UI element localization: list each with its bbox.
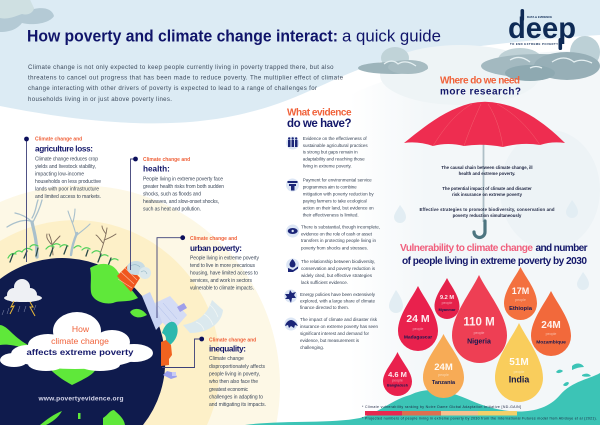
panel: inequality (162, 337, 266, 408)
evidence 6: insurance on extreme poverty has seen (300, 324, 378, 329)
evidence 6: challenging. (300, 345, 324, 350)
chart: vulnerability drops (383, 267, 571, 402)
logo: deep: deep (508, 12, 576, 45)
research question 1 (441, 165, 533, 176)
panel: inequality: challenges in adapting to (209, 394, 263, 400)
panel: more research (404, 76, 565, 238)
drop: Myanmar (434, 278, 460, 319)
panel: agriculture loss: lands with poor infrastructure (35, 186, 99, 192)
panel: agriculture loss: Climate change and (35, 136, 82, 142)
drop: Myanmar: people (442, 301, 452, 305)
drop: Bangladesh: people (392, 378, 403, 382)
evidence 5: Energy policies have been extensively (300, 292, 376, 297)
heading: where do we need more research (440, 76, 521, 98)
callout cloud (0, 312, 153, 371)
drop: Ethiopia: 17M (512, 286, 529, 296)
drop: Madagascar (398, 286, 438, 351)
evidence 4 (286, 258, 376, 285)
evidence 2: action on their land, but evidence on (303, 206, 374, 210)
panel: health: heatwaves, and slow-onset shocks, (143, 199, 219, 205)
evidence 3: There is substantial, though incomplete, (301, 224, 380, 230)
panel: health: health: (143, 164, 170, 174)
panel: inequality: people living in poverty, (209, 372, 260, 378)
website link: www.povertyevidence.org (38, 396, 124, 402)
icon: cash transfer (286, 224, 299, 238)
panel: inequality: Climate change (209, 356, 244, 362)
icon: energy (284, 290, 297, 303)
drop: Bangladesh: 4.6 M (388, 370, 407, 379)
note: vulnerability ranking: * Climate vulnerability ranking by Notre Dame Global Adaptation Initiative [ND-GAIN] (362, 405, 521, 409)
drop: Myanmar: 9.2 M (440, 295, 454, 301)
evidence 3: transfers in protecting people living in (301, 238, 376, 243)
panel: inequality: inequality: (209, 344, 246, 354)
drop: Tanzania: Tanzania (432, 380, 456, 386)
icon: hand with plant (286, 258, 299, 272)
panel: urban poverty: urban poverty: (190, 244, 242, 253)
evidence 1: Evidence on the effectiveness of (303, 136, 367, 141)
drop: India: 51M (509, 357, 529, 368)
panel: health: such as heat and pollution. (143, 206, 201, 212)
drop: Mozambique: 24M (541, 320, 561, 331)
drop: Mozambique: people (546, 332, 556, 336)
title suffix: a quick guide (342, 26, 441, 46)
intro text: change interacting with other drivers of poverty is expected to lead to a range of challenges for (28, 85, 317, 92)
evidence 1: is strong but gaps remain in (303, 150, 358, 155)
panel: health (130, 157, 224, 270)
logo: deep: TO END EXTREME POVERTY (510, 42, 558, 46)
heading: vulnerability (400, 243, 588, 267)
panel: urban poverty (157, 235, 260, 318)
evidence 5: explored, with a large share of climate (300, 298, 375, 304)
tree illustrations (7, 200, 118, 266)
title: How poverty and climate change interact: (27, 26, 338, 46)
drop: Nigeria: people (474, 331, 484, 335)
intro text: threatens to cancel out progress that has been made to reduce poverty. The multiplier effect of climate (28, 74, 344, 82)
legend and notes (362, 405, 597, 420)
icon: storm cloud (2, 279, 42, 316)
panel: urban poverty: Climate change and (190, 236, 237, 242)
evidence 6: evidence, but measurement is (300, 338, 360, 343)
heading: what evidence (287, 108, 352, 130)
panel: agriculture loss: yields and livestock viability, (35, 164, 96, 170)
evidence 2: mitigation with poverty reduction by (303, 192, 374, 196)
heading: vulnerability: and number (536, 243, 588, 254)
heading: where do we need more research: Where do we need (440, 76, 520, 86)
callout title: climate change (51, 336, 109, 346)
panel: inequality: and mitigating its impacts. (209, 402, 266, 408)
panel: health: Climate change and (143, 157, 190, 163)
icon: payment (286, 178, 299, 192)
panel: inequality: Climate change and (209, 338, 256, 344)
drop: Madagascar: people (413, 327, 423, 331)
evidence 1 (286, 136, 368, 169)
panel: urban poverty: tend to live in more precarious (190, 263, 256, 269)
research question 3: poverty reduction simultaneously (453, 213, 522, 218)
panel: agriculture loss (24, 136, 101, 262)
drop: India (495, 323, 543, 402)
panel: inequality: greatest economic (209, 387, 248, 393)
evidence 2: Payment for environmental service (303, 178, 372, 183)
drop: Mozambique (531, 291, 571, 356)
heading: vulnerability: Vulnerability to climate change (400, 243, 533, 254)
panel: inequality: who then also face the (209, 379, 258, 385)
evidence 4: widely cited, but effective strategies (301, 273, 373, 278)
icon: flood wave (162, 322, 178, 348)
panel: health: shocks, such as floods and (143, 192, 201, 198)
evidence 1: adaptability and reaching those (303, 157, 365, 162)
intro text (28, 64, 344, 103)
heading: vulnerability: of people living in extreme poverty by 2030 (402, 256, 587, 267)
drop: Tanzania: people (438, 373, 449, 377)
evidence 1: sustainable agricultural practices (303, 143, 368, 148)
panel: agriculture loss: Climate change reduces crop (35, 156, 98, 162)
drop: Madagascar: 24 M (406, 313, 430, 325)
heading: what evidence: What evidence (287, 108, 352, 118)
drop: Ethiopia: Ethiopia (509, 306, 533, 312)
evidence 6 (284, 317, 378, 350)
panel: urban poverty: People living in extreme poverty (190, 256, 260, 262)
icon: damaged city (142, 292, 187, 332)
continents (0, 264, 147, 425)
evidence 4: conservation and poverty reduction is (301, 266, 376, 271)
drop: Nigeria: Nigeria (467, 338, 491, 346)
icon: house and person (161, 340, 177, 379)
panel: agriculture loss: agriculture loss: (35, 144, 93, 154)
evidence 2: paying farmers to take ecological (303, 198, 367, 204)
panel: urban poverty: vulnerable to climate impacts. (190, 286, 254, 292)
evidence 2: programmes aim to combine (303, 184, 357, 190)
panel: inequality: disproportionately affects (209, 364, 266, 370)
drop: Ethiopia: people (515, 298, 526, 302)
drop: Bangladesh (383, 352, 412, 396)
panel: agriculture loss: households on less productive (35, 179, 101, 185)
icon: people (286, 136, 299, 150)
panel: urban poverty: housing, have limited access to (190, 270, 258, 276)
evidence 2 (286, 178, 374, 218)
evidence 4: The relationship between biodiversity, (301, 259, 375, 264)
panel: urban poverty: services, and work in sectors (190, 278, 252, 284)
callout title (26, 324, 134, 357)
research question 2 (442, 186, 532, 197)
research question 3: Effective strategies to promote biodiversity, conservation and (420, 207, 555, 212)
drop: India: India (509, 374, 529, 384)
intro text: households living in or just above poverty lines. (28, 96, 172, 103)
evidence 6: The impact of climate and disaster risk (300, 317, 378, 322)
callout title: affects extreme poverty (26, 347, 134, 357)
panel: health: People living in extreme poverty face (143, 176, 223, 182)
panel: agriculture loss: and limited access to markets. (35, 194, 101, 200)
cloud: top left (0, 0, 54, 32)
drop: Nigeria: 110 M (463, 316, 495, 328)
drop: Myanmar: Myanmar (438, 307, 456, 312)
logo: deep: DATA & EVIDENCE (527, 15, 552, 19)
cloud: centre (358, 47, 428, 74)
heading: what evidence: do we have? (287, 118, 352, 130)
evidence 5 (284, 290, 376, 310)
evidence 3 (286, 224, 380, 250)
callout title: How (72, 324, 90, 334)
icon: wind (183, 300, 223, 333)
icon: brick building and smoke (117, 261, 151, 292)
evidence 1: living in extreme poverty. (303, 164, 352, 169)
note: projected numbers: * Projected numbers of people living in extreme poverty by 2030 from the International Futures model from Abidoye et al (2021). (362, 416, 597, 420)
drop: Bangladesh: Bangladesh (387, 384, 409, 388)
panel: what evidence (284, 108, 380, 350)
drop: Nigeria (452, 275, 507, 363)
evidence 3: evidence on the role of cash or asset (301, 232, 373, 236)
research question 2: The potential impact of climate and disaster (442, 186, 532, 191)
cloud: right (481, 36, 600, 81)
evidence 4: lack sufficient evidence. (301, 280, 348, 285)
icon: insurance umbrella (284, 318, 298, 330)
research question 1: health and extreme poverty. (459, 171, 515, 176)
research question 1: The causal chain between climate change, ill (441, 165, 533, 170)
legend bar (365, 411, 517, 416)
drop: Mozambique: Mozambique (536, 340, 566, 346)
drop: India: people (514, 370, 524, 374)
globe (0, 200, 165, 425)
drop: Tanzania (423, 334, 464, 398)
drop: Tanzania: 24M (434, 362, 453, 373)
icon: umbrella (404, 102, 565, 238)
intro text: Climate change is not only expected to keep people currently living in poverty trapped there, but also (28, 64, 334, 71)
research question 2: risk insurance on extreme poverty (452, 192, 523, 197)
drop: Madagascar: Madagascar (404, 334, 432, 340)
evidence 3: poverty from shocks and stresses. (301, 246, 368, 250)
evidence 5: finance directed to them. (300, 305, 349, 310)
heading: where do we need more research: more research? (440, 86, 521, 98)
panel: health: greater health risks from both sudden (143, 184, 224, 190)
panel: agriculture loss: impacting low-income (35, 172, 84, 178)
drop: Ethiopia (504, 267, 537, 320)
research question 3 (420, 207, 555, 218)
evidence 2: their effectiveness is limited. (303, 212, 359, 218)
evidence 6: significant interest and demand for (300, 331, 369, 336)
